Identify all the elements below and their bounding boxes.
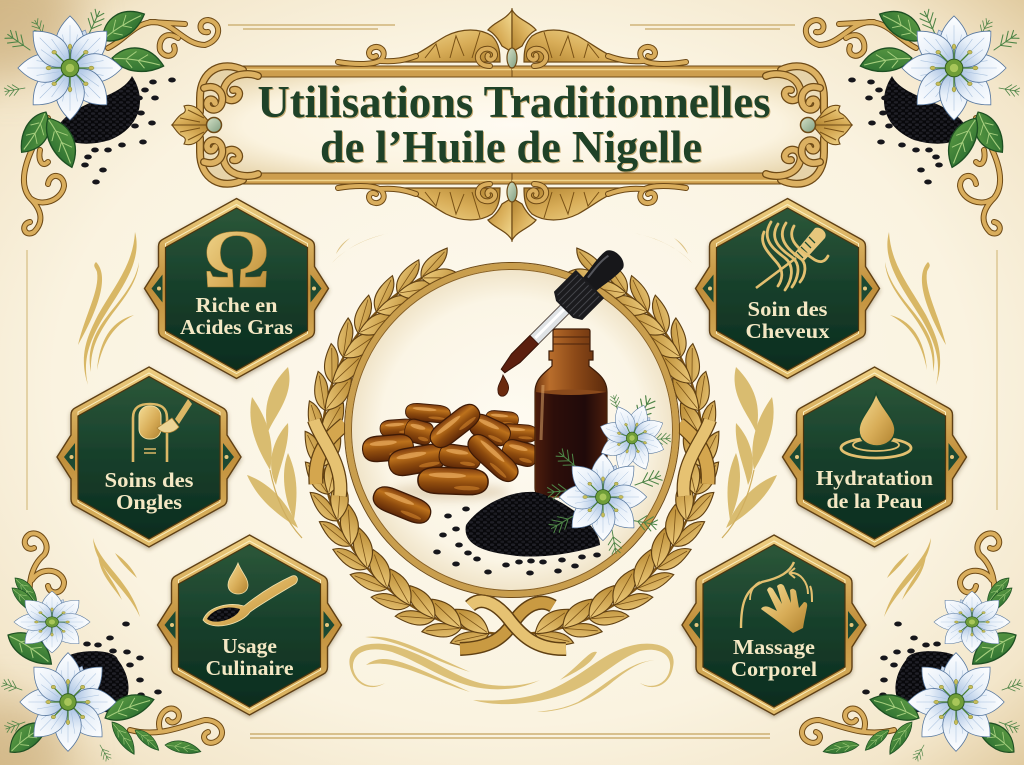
icon: spoon and drop (203, 563, 297, 626)
icon: massage hand (741, 562, 812, 633)
badge: Riche en Acides Gras (144, 198, 328, 378)
title text: Utilisations Traditionnelles (258, 77, 770, 127)
badge: Massage Corporel: Massage (733, 635, 815, 659)
badge: Riche en Acides Gras: Riche en (196, 293, 278, 317)
icon: hair and comb (756, 222, 828, 290)
icon: omega: Ω (203, 213, 270, 306)
badge: Massage Corporel (682, 535, 866, 715)
capsules (361, 399, 540, 527)
badge: Soin des Cheveux: Cheveux (746, 319, 830, 343)
badge: Hydratation de la Peau (782, 367, 966, 547)
badge: Soin des Cheveux (696, 198, 880, 378)
corner ornament bottom-right (802, 533, 1023, 762)
laurel wreath (304, 247, 720, 649)
badge: Massage Corporel: Corporel (731, 657, 817, 681)
title banner (172, 10, 852, 240)
badge: Usage Culinaire (158, 535, 342, 715)
badge: Usage Culinaire: Usage (222, 634, 277, 658)
corner ornament top-left (4, 4, 218, 233)
badge: Hydratation de la Peau: Hydratation (816, 466, 933, 490)
badge: Soin des Cheveux: Soin des (748, 297, 828, 321)
gold ring (348, 266, 676, 594)
icon: nail and brush (133, 399, 192, 462)
badge: Soins des Ongles: Soins des (104, 468, 194, 492)
swash decorations (78, 232, 946, 617)
title banner: de l’Huile de Nigelle (320, 122, 702, 172)
badge: Hydratation de la Peau: de la Peau (826, 489, 923, 513)
bottom flourish (349, 637, 674, 712)
bottle (535, 329, 607, 497)
badge: Usage Culinaire: Culinaire (206, 656, 294, 680)
ribbon knot (460, 601, 566, 649)
flower sprigs (547, 394, 675, 555)
badge: Soins des Ongles (57, 367, 241, 547)
corner ornament top-right (806, 4, 1020, 233)
badge: Riche en Acides Gras: Acides Gras (180, 315, 293, 339)
dropper (489, 241, 633, 396)
badge: Soins des Ongles: Ongles (116, 490, 182, 514)
central medallion (344, 241, 680, 598)
corner ornament bottom-left (1, 533, 222, 762)
nigella seeds (433, 492, 601, 576)
icon: oil drop with ripple (841, 393, 911, 458)
